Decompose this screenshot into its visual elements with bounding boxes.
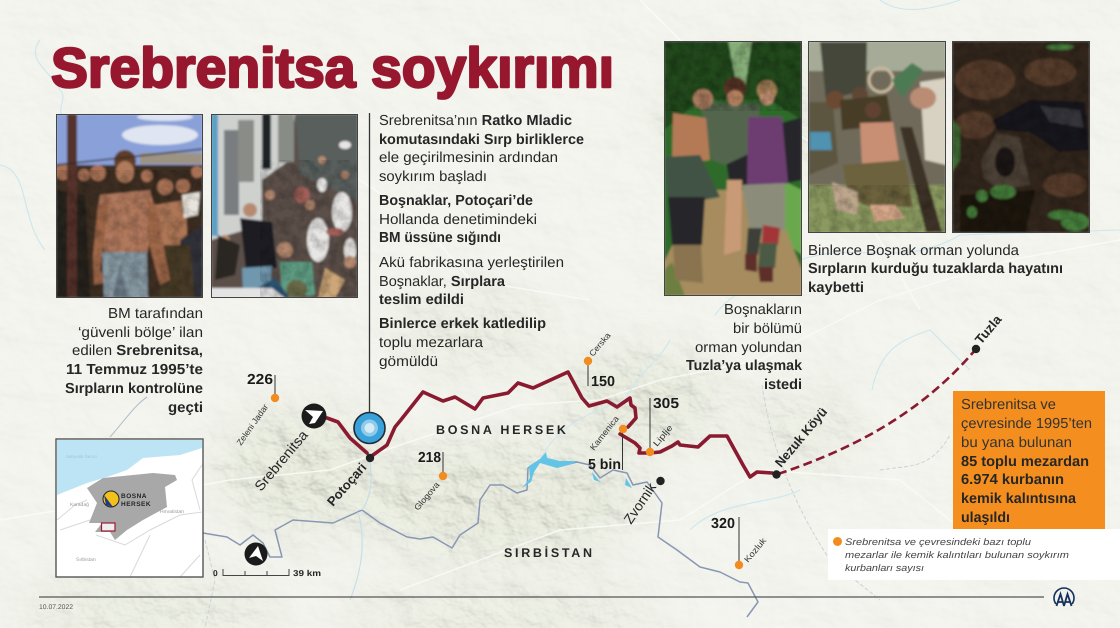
callout: orange statistics box: bu yana bulunan bbox=[961, 435, 1072, 451]
inset locator map: Hırvatistan bbox=[160, 509, 184, 515]
caption: road to Tuzla: orman yolundan bbox=[695, 340, 802, 356]
text block: events: gömüldü bbox=[379, 354, 438, 370]
marker: Zeleni Jadar 226 bbox=[234, 372, 279, 447]
legend: Srebrenitsa ve çevresindeki bazı toplu bbox=[845, 537, 1032, 548]
route: Srebrenitsa to Nezuk bbox=[327, 372, 772, 477]
callout: orange statistics box: 6.974 kurbanın bbox=[961, 472, 1064, 488]
scale bar bbox=[213, 568, 322, 578]
marker: Zvornik: Zvornik bbox=[620, 479, 660, 527]
title: Srebrenitsa soykırımı bbox=[51, 36, 614, 99]
photo: soldiers tending a wounded man bbox=[808, 41, 946, 233]
callout: orange statistics box: kemik kalıntısına bbox=[961, 491, 1077, 507]
marker: Kamenica 5 bin: Kamenica bbox=[588, 414, 621, 452]
callout: orange statistics box: ulaşıldı bbox=[961, 510, 1010, 526]
caption: safe zone bbox=[65, 306, 203, 416]
caption: road to Tuzla: Boşnakların bbox=[724, 302, 802, 318]
photo: three men walking on forest path bbox=[664, 41, 802, 296]
text block: events: toplu mezarlara bbox=[379, 335, 484, 351]
inset locator map: HERSEK bbox=[121, 501, 151, 508]
caption: forest road traps: Sırpların kurduğu tuzaklarda hayatını bbox=[808, 261, 1063, 277]
text block: events: BM üssüne sığındı bbox=[379, 230, 501, 246]
caption: safe zone: geçti bbox=[168, 400, 203, 416]
marker: Liplje 305: Liplje bbox=[651, 422, 675, 448]
marker: Cerska 150 bbox=[584, 330, 615, 390]
marker: Nezuk Köyü: Nezuk Köyü bbox=[772, 404, 830, 470]
photo: crowd beside a train bbox=[211, 114, 358, 298]
date: 10.07.2022 bbox=[39, 604, 73, 611]
marker: Zeleni Jadar 226: Zeleni Jadar bbox=[234, 402, 270, 447]
scale bar: 39 km bbox=[293, 568, 322, 578]
marker: Kamenica 5 bin: 5 bin bbox=[588, 457, 621, 473]
legend: kurbanları sayısı bbox=[845, 563, 924, 574]
river: Drina bbox=[203, 452, 758, 617]
icon: UN emblem bbox=[354, 412, 385, 444]
icon: river direction arrow bbox=[244, 542, 268, 566]
caption: forest road traps bbox=[808, 243, 1063, 296]
caption: road to Tuzla: Tuzla’ya ulaşmak bbox=[686, 358, 803, 374]
inset locator map: BOSNA bbox=[121, 493, 147, 500]
inset locator map bbox=[56, 439, 203, 577]
icon: Srebrenitsa arrow bbox=[302, 404, 326, 428]
marker: Potoçari: Potoçari bbox=[324, 460, 369, 509]
caption: safe zone: Sırpların kontrolüne bbox=[65, 381, 203, 397]
legend bbox=[828, 529, 1120, 580]
marker: Liplje 305 bbox=[646, 396, 679, 456]
text block: events: Akü fabrikasına yerleştirilen bbox=[379, 255, 564, 271]
caption: safe zone: ‘güvenli bölge’ ilan bbox=[78, 325, 203, 341]
callout: orange statistics box: Srebrenitsa ve bbox=[961, 397, 1056, 413]
caption: road to Tuzla: bir bölümü bbox=[733, 321, 802, 337]
marker: Cerska 150: Cerska bbox=[587, 330, 613, 358]
marker: Kamenica 5 bin bbox=[588, 414, 627, 473]
scale bar: 0 bbox=[213, 568, 218, 578]
marker: Liplje 305: 305 bbox=[653, 396, 679, 412]
marker: Glogova 218 bbox=[412, 450, 447, 512]
caption: safe zone: 11 Temmuz 1995’te bbox=[66, 362, 203, 378]
text block: events: Hollanda denetimindeki bbox=[379, 212, 537, 228]
country label: Bosna Hersek: BOSNA HERSEK bbox=[436, 423, 569, 437]
marker: Kozluk 320: 320 bbox=[711, 516, 735, 532]
text block: events: teslim edildi bbox=[379, 292, 464, 308]
legend: mezarlar ile kemik kalıntıları bulunan soykırım bbox=[845, 550, 1069, 561]
callout: orange statistics box: 85 toplu mezardan bbox=[961, 454, 1089, 470]
text block: events bbox=[379, 113, 584, 370]
route: dashed Nezuk to Tuzla bbox=[778, 349, 976, 474]
callout: orange statistics box bbox=[953, 391, 1105, 531]
marker: Kozluk 320 bbox=[711, 516, 769, 569]
marker: Glogova 218: Glogova bbox=[412, 480, 442, 512]
text block: events: komutasındaki Sırp birliklerce bbox=[379, 132, 584, 148]
inset locator map: Adriyatik Denizi bbox=[66, 454, 97, 459]
text block: events: Binlerce erkek katledilip bbox=[379, 316, 546, 332]
marker: Cerska 150: 150 bbox=[591, 374, 615, 390]
photo: emaciated man behind barbed wire bbox=[56, 114, 203, 298]
footer rule bbox=[39, 596, 1044, 598]
caption: safe zone: edilen Srebrenitsa, bbox=[72, 343, 203, 359]
country label: Sırbistan: SIRBİSTAN bbox=[504, 546, 595, 560]
text block: events: Boşnaklar, Potoçari’de bbox=[379, 193, 533, 209]
central vertical leader line bbox=[368, 113, 370, 412]
caption: road to Tuzla: istedi bbox=[764, 377, 802, 393]
marker: Glogova 218: 218 bbox=[418, 450, 441, 466]
marker: Zeleni Jadar 226: 226 bbox=[247, 372, 273, 388]
text block: events: Boşnaklar, Sırplara bbox=[379, 274, 506, 290]
text block: events: Srebrenitsa’nın Ratko Mladic bbox=[379, 113, 572, 129]
callout: orange statistics box: çevresinde 1995’ten bbox=[961, 416, 1092, 432]
marker: Tuzla: Tuzla bbox=[972, 311, 1005, 347]
label: Srebrenitsa: Srebrenitsa bbox=[251, 427, 311, 494]
caption: safe zone: BM tarafından bbox=[108, 306, 203, 322]
caption: road to Tuzla bbox=[686, 302, 803, 393]
icon: AA logo bbox=[1054, 588, 1074, 606]
caption: forest road traps: kaybetti bbox=[808, 280, 864, 296]
text block: events: ele geçirilmesinin ardından bbox=[379, 150, 558, 166]
marker: Kozluk 320: Kozluk bbox=[742, 535, 769, 564]
text block: events: soykırım başladı bbox=[379, 169, 487, 185]
photo: boots among forest leaves bbox=[952, 41, 1090, 233]
inset locator map: Karadağ bbox=[70, 502, 89, 508]
inset locator map: Sırbistan bbox=[76, 557, 96, 563]
caption: forest road traps: Binlerce Boşnak orman yolunda bbox=[808, 243, 1020, 259]
